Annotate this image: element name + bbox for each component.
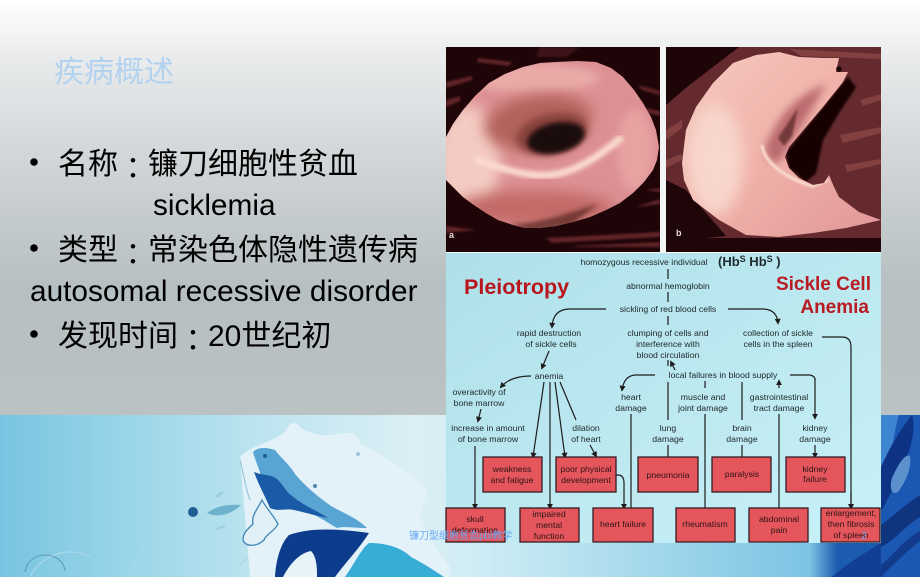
flow labels: bone marrow — [454, 398, 505, 408]
photo a label: a — [449, 230, 455, 240]
box labels: development — [561, 475, 611, 485]
flow labels: of heart — [571, 434, 601, 444]
flow labels: sickling of red blood cells — [620, 304, 717, 314]
right edge deep blue water — [881, 415, 920, 577]
dark water under diagram — [832, 543, 881, 577]
bullet list — [30, 144, 418, 360]
box labels: rheumatism — [682, 519, 728, 529]
flow labels: lung — [660, 423, 676, 433]
flow labels: local failures in blood supply — [669, 370, 778, 380]
bullet list: ： — [118, 144, 148, 188]
box labels: deformation — [452, 525, 498, 535]
bullet list: 常染色体隐性遗传病 — [148, 234, 418, 267]
box labels: impaired — [532, 509, 566, 519]
page number: 2 — [861, 531, 867, 542]
genotype: S — [740, 254, 746, 264]
box labels — [452, 464, 876, 541]
flow labels: collection of sickle — [743, 328, 813, 338]
water splash banner — [0, 415, 920, 577]
diagram: sickle cell anemia pleiotropy — [446, 253, 881, 543]
box labels: function — [534, 531, 564, 541]
flow labels — [451, 257, 831, 444]
photo frame — [446, 47, 881, 543]
arrows — [475, 269, 851, 508]
box labels: kidney — [802, 464, 828, 474]
flow labels: increase in amount — [451, 423, 525, 433]
box labels: poor physical — [560, 464, 612, 474]
flow labels: tract damage — [754, 403, 805, 413]
flow labels: abnormal hemoglobin — [626, 281, 710, 291]
heading: Pleiotropy: Pleiotropy — [464, 275, 569, 299]
flow labels: blood circulation — [637, 350, 700, 360]
flow labels: of sickle cells — [525, 339, 577, 349]
photo a: normal red blood cell — [436, 47, 660, 252]
box labels: mental — [536, 520, 562, 530]
heading: Sickle Cell Anemia: Sickle Cell — [776, 274, 871, 295]
bullet list: 镰刀细胞性贫血 — [148, 148, 358, 181]
bullet list: 类型 — [58, 234, 118, 267]
flow labels: heart — [621, 392, 641, 402]
box labels: pneumonia — [646, 470, 690, 480]
heading: Sickle Cell Anemia — [776, 274, 871, 318]
flow labels: dilation — [572, 423, 600, 433]
box labels: abdominal — [759, 514, 799, 524]
flow labels: overactivity of — [452, 387, 506, 397]
footer text: 镰刀型细胞贫血pbl教学 — [409, 529, 512, 542]
flow labels: clumping of cells and — [627, 328, 709, 338]
bullet list: 20世纪初 — [208, 320, 331, 353]
flow labels: rapid destruction — [517, 328, 581, 338]
flow labels: damage — [652, 434, 684, 444]
flow labels: brain — [732, 423, 752, 433]
box labels: pain — [771, 525, 787, 535]
genotype: (Hb — [718, 254, 740, 269]
flow labels: gastrointestinal — [750, 392, 808, 402]
flow labels: muscle and — [681, 392, 725, 402]
bullet list: 名称 — [58, 148, 118, 181]
flow labels: damage — [726, 434, 758, 444]
box labels: weakness — [492, 464, 532, 474]
symptom boxes row 1 — [483, 457, 845, 492]
flow labels: damage — [615, 403, 647, 413]
flow labels: of bone marrow — [458, 434, 519, 444]
flow labels: anemia — [535, 371, 563, 381]
box labels: then fibrosis — [828, 519, 875, 529]
title: 疾病概述 — [54, 56, 174, 89]
box labels: heart failure — [600, 519, 646, 529]
bullet list: ： — [118, 230, 148, 274]
bullet list: autosomal recessive disorder — [30, 275, 418, 308]
flow labels: homozygous recessive individual — [580, 257, 708, 267]
flow labels: interference with — [636, 339, 700, 349]
flow labels: joint damage — [677, 403, 728, 413]
box labels: skull — [466, 514, 484, 524]
flow labels: damage — [799, 434, 831, 444]
box labels: and fatigue — [490, 475, 534, 485]
heading: Sickle Cell Anemia: Anemia — [800, 297, 869, 318]
genotype: ) — [773, 254, 781, 269]
bullet list: 发现时间 — [58, 320, 178, 353]
bullet list: ： — [178, 316, 208, 360]
photo b: sickle cell — [666, 47, 881, 252]
genotype: Hb — [746, 254, 767, 269]
box labels: failure — [803, 474, 827, 484]
box labels: of spleen — [833, 530, 869, 540]
box labels: paralysis — [725, 469, 760, 479]
genotype: S — [767, 254, 773, 264]
flow labels: kidney — [802, 423, 828, 433]
bullet list: sicklemia — [153, 189, 276, 222]
symptom boxes row 2 — [446, 508, 880, 542]
box labels: enlargement, — [826, 508, 876, 518]
photo b label: b — [676, 228, 682, 238]
flow labels: cells in the spleen — [743, 339, 813, 349]
